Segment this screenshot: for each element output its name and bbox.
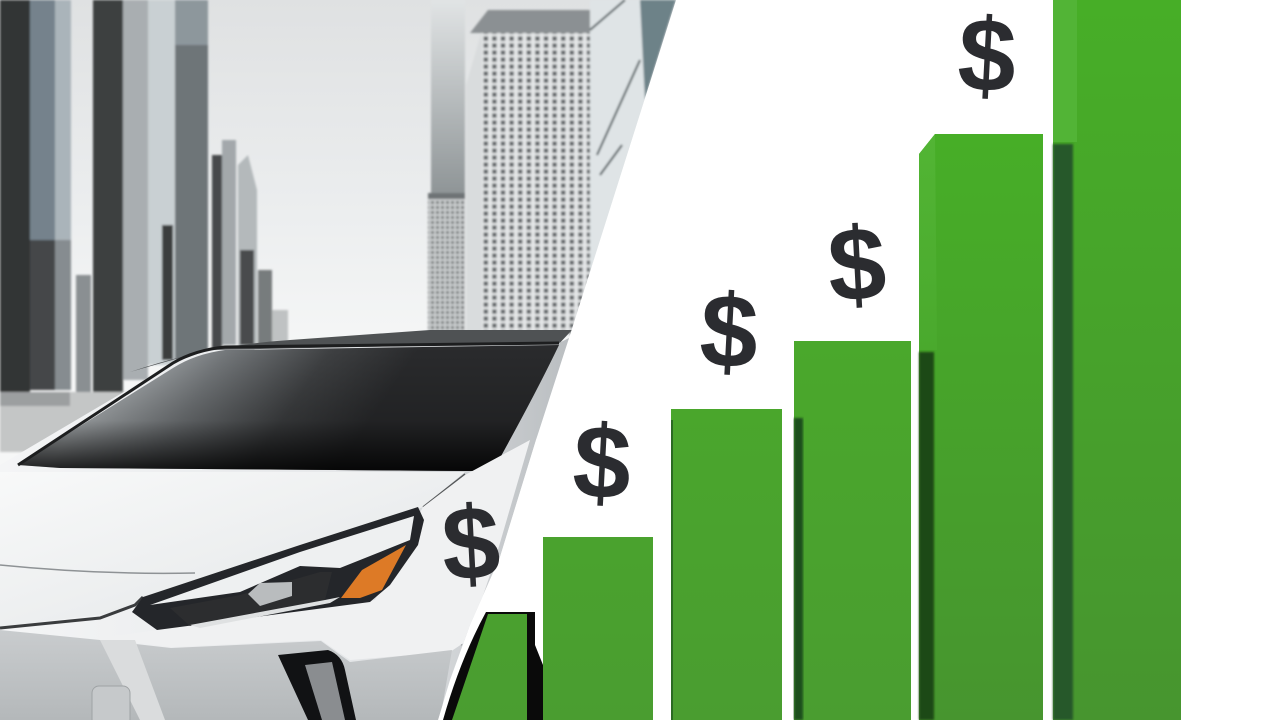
bar 1 <box>443 612 543 720</box>
grille <box>278 650 356 720</box>
front fender <box>298 440 530 660</box>
windshield <box>18 343 559 471</box>
dollar signs <box>439 0 1019 603</box>
front bumper <box>0 630 452 720</box>
bar 5 <box>919 134 1043 720</box>
back foggy tower <box>431 0 465 193</box>
mid buildings <box>212 155 222 350</box>
car body <box>0 330 575 720</box>
headlight <box>132 507 424 630</box>
street level <box>0 390 125 453</box>
bar 6 <box>1053 0 1181 720</box>
dollar 3: $ <box>697 273 761 391</box>
sky background <box>0 0 676 464</box>
dollar 2: $ <box>570 404 634 522</box>
body shell <box>0 335 575 720</box>
central glass tower <box>93 0 123 392</box>
bar 2 <box>543 537 653 720</box>
right glass building <box>588 0 670 277</box>
main office tower <box>466 44 482 330</box>
dollar 1: $ <box>439 485 503 603</box>
dollar 5: $ <box>955 0 1019 115</box>
dollar 4: $ <box>825 206 889 324</box>
bar 4 <box>794 341 911 720</box>
bar 3 <box>671 409 782 720</box>
city buildings <box>0 0 676 452</box>
hood <box>242 472 465 526</box>
left glass tower <box>0 0 30 392</box>
bar chart: rising green bars <box>443 0 1181 720</box>
fog lamp cover <box>92 686 130 720</box>
roof <box>130 330 572 372</box>
hood creases <box>0 565 195 573</box>
panel: city and car photo <box>0 0 680 720</box>
